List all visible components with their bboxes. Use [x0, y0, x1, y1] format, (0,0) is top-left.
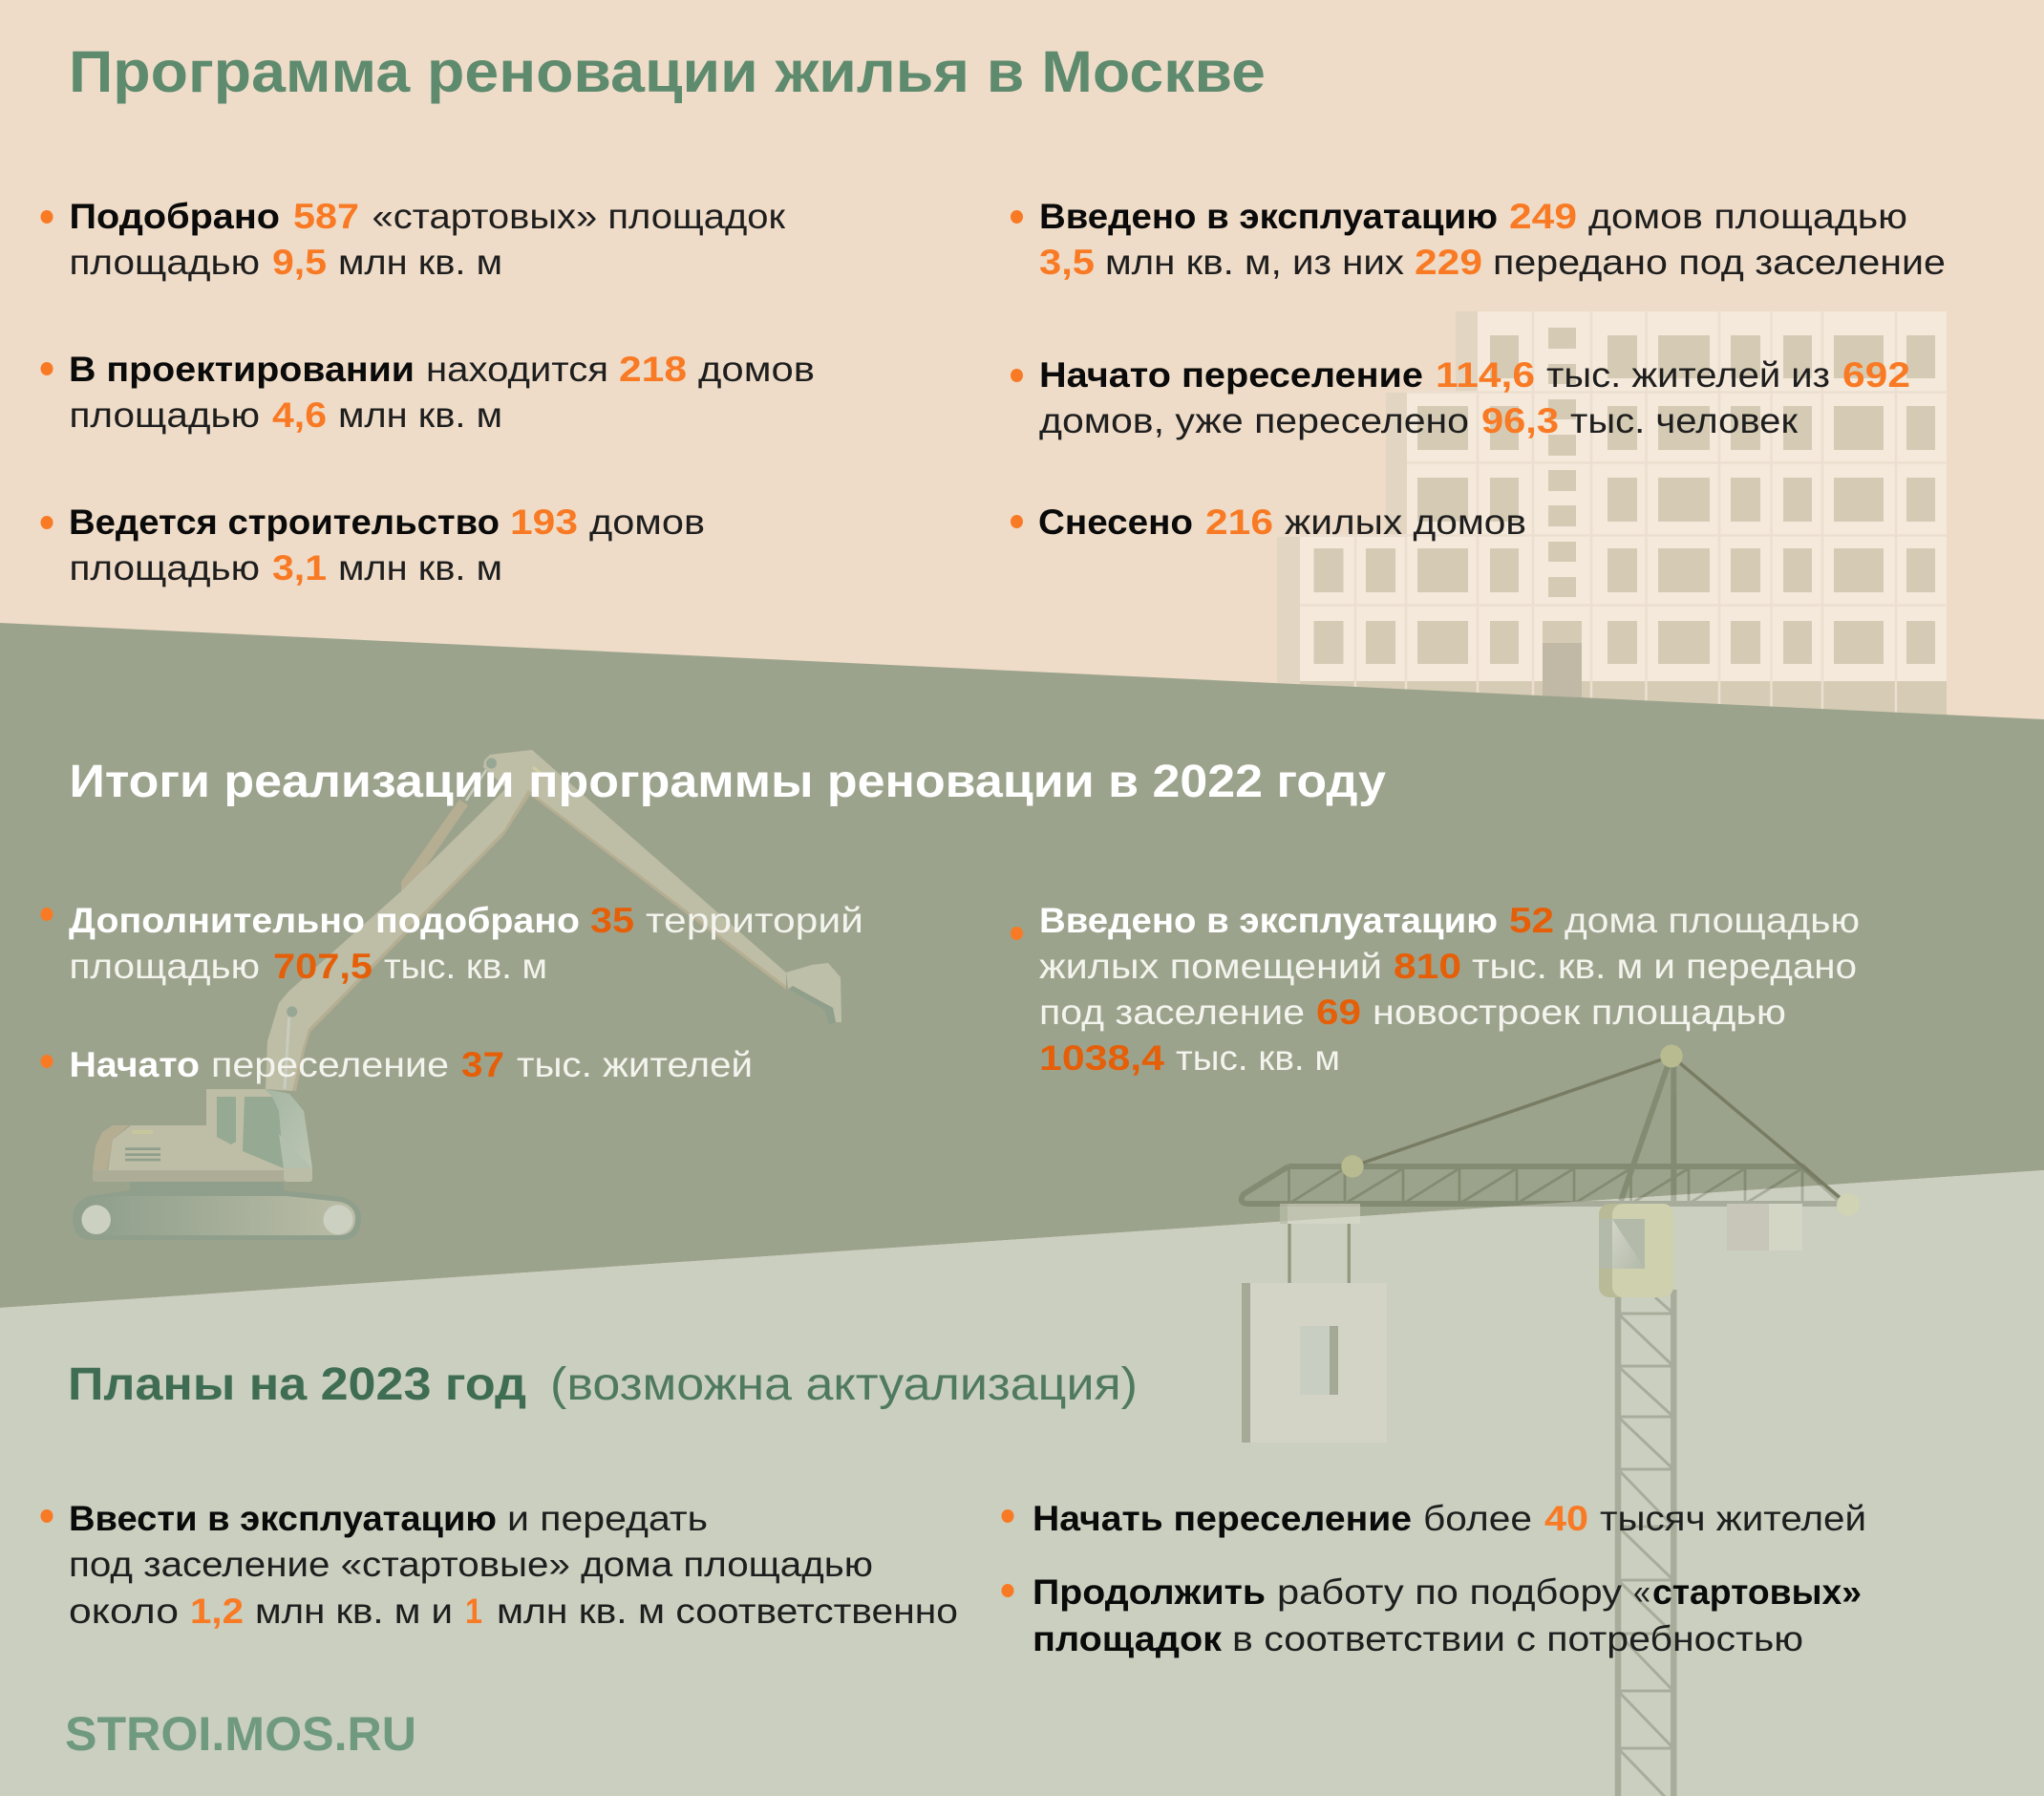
text block: green section right column: 810: [1394, 947, 1461, 986]
bullet item: under construction: 193: [510, 502, 578, 542]
footer: source site: STROI.MOS.RU: [65, 1707, 416, 1761]
bullet item: resettlement started: 96,3: [1481, 401, 1559, 440]
text block: green section right column: жилых помещений: [1039, 947, 1382, 986]
bullet item: continue site selection: [1001, 1572, 1862, 1658]
bullet item: selected sites: 9,5: [272, 243, 327, 282]
text block: green section right column: 1038,4: [1039, 1038, 1164, 1078]
bullet item: under construction: площадью: [69, 548, 260, 588]
illustration: apartment building: [1277, 311, 1947, 726]
bullet item: in design: площадью: [69, 396, 260, 435]
heading: plans for 2023: (возможна актуализация): [550, 1359, 1138, 1410]
bullet item: selected sites: [40, 197, 786, 282]
bullet item: selected sites: Подобрано: [69, 197, 280, 236]
text block: green section right column: 52: [1509, 901, 1554, 940]
bullet item: commissioned: 229: [1415, 243, 1482, 282]
panel: green middle band background: [0, 623, 2044, 1308]
bullet item: resettlement started: домов, уже переселено: [1039, 401, 1469, 440]
bullet item: continue site selection: «: [1633, 1572, 1650, 1612]
bullet item: resettlement of 37 thousand: тыс. жителей: [517, 1045, 753, 1084]
bullet item: demolished: жилых домов: [1285, 502, 1526, 542]
text block: green section right column: Введено в эксплуатацию: [1039, 901, 1498, 940]
bullet item: selected sites: площадью: [69, 243, 260, 282]
text block: plans left column: 1,2: [190, 1592, 244, 1631]
bullet item: commissioned: 3,5: [1039, 243, 1095, 282]
text block: green section right column: под заселение: [1039, 993, 1305, 1032]
bullet item: continue site selection: Продолжить: [1033, 1572, 1266, 1612]
bullet item: under construction: [40, 502, 705, 588]
bullet item: under construction: домов: [589, 502, 705, 542]
bullet item: additional territories: 707,5: [273, 947, 373, 986]
text block: beige section right column: [1011, 197, 1946, 542]
heading: main title: Программа реновации жилья в Москве: [69, 39, 1266, 104]
bullet item: commissioned: передано под заселение: [1493, 243, 1946, 282]
bullet item: continue site selection: работу по подбору: [1277, 1572, 1623, 1612]
bullet item: under construction: млн кв. м: [338, 548, 502, 588]
bullet item: resettlement started: Начато переселение: [1039, 355, 1423, 395]
bullet item: demolished: Снесено: [1038, 502, 1193, 542]
text block: green section right column: дома площадью: [1565, 901, 1860, 940]
bullet item: continue site selection: площадок: [1033, 1619, 1223, 1658]
panel: beige top section background: [0, 0, 2044, 764]
bullet item: under construction: Ведется строительство: [69, 502, 500, 542]
text block: plans left column: и передать: [507, 1499, 708, 1538]
bullet item: commissioned: [1011, 197, 1946, 282]
text block: plans left column: [40, 1499, 958, 1631]
bullet item: demolished: 216: [1205, 502, 1273, 542]
text block: plans left column: Ввести в эксплуатацию: [69, 1499, 497, 1538]
bullet item: start resettlement: более: [1423, 1499, 1532, 1538]
illustration: tower crane: [1242, 1045, 1860, 1796]
bullet item: selected sites: млн кв. м: [338, 243, 502, 282]
bullet item: additional territories: территорий: [646, 901, 863, 940]
bullet item: resettlement started: тыс. человек: [1570, 401, 1799, 440]
bullet item: continue site selection: в соответствии с потребностью: [1232, 1619, 1803, 1658]
bullet item: commissioned: млн кв. м, из них: [1105, 243, 1405, 282]
bullet item: in design: млн кв. м: [338, 396, 502, 435]
panel: light bottom section background: [0, 1170, 2044, 1796]
text block: plans left column: под заселение «стартовые» дома площадью: [69, 1545, 873, 1584]
bullet item: resettlement started: 114,6: [1436, 355, 1535, 395]
bullet item: additional territories: Дополнительно подобрано: [69, 901, 580, 940]
bullet item: commissioned: домов площадью: [1588, 197, 1907, 236]
bullet item: under construction: 3,1: [272, 548, 327, 588]
text block: green section right column: тыс. кв. м и передано: [1472, 947, 1857, 986]
text block: beige section left column: [40, 197, 815, 588]
bullet item: additional territories: тыс. кв. м: [384, 947, 547, 986]
bullet item: demolished: [1011, 502, 1526, 542]
bullet item: additional territories: 35: [590, 901, 634, 940]
text block: green section right column: тыс. кв. м: [1176, 1038, 1340, 1078]
text block: green section left column: [40, 901, 863, 1084]
bullet item: commissioned: Введено в эксплуатацию: [1039, 197, 1498, 236]
bullet item: start resettlement: 40: [1544, 1499, 1588, 1538]
text block: green section right column: [1011, 901, 1860, 1078]
bullet item: start resettlement: тысяч жителей: [1600, 1499, 1866, 1538]
heading: plans for 2023: [68, 1359, 1138, 1410]
bullet item: start resettlement: [1001, 1499, 1866, 1538]
bullet item: in design: находится: [426, 350, 608, 389]
heading: 2022 results: Итоги реализации программы реновации в 2022 году: [69, 757, 1386, 807]
heading: plans for 2023: Планы на 2023 год: [68, 1359, 526, 1410]
bullet item: in design: В проектировании: [69, 350, 415, 389]
bullet item: selected sites: «стартовых» площадок: [373, 197, 786, 236]
text block: green section right column: новостроек площадью: [1373, 993, 1786, 1032]
text block: plans left column: 1: [465, 1592, 482, 1631]
bullet item: resettlement of 37 thousand: Начато: [69, 1045, 200, 1084]
bullet item: resettlement started: тыс. жителей из: [1546, 355, 1830, 395]
bullet item: resettlement of 37 thousand: [40, 1045, 753, 1084]
bullet item: in design: 4,6: [272, 396, 327, 435]
bullet item: in design: [40, 350, 815, 435]
bullet item: start resettlement: Начать переселение: [1033, 1499, 1412, 1538]
bullet item: in design: домов: [698, 350, 815, 389]
text block: plans right column: [1001, 1499, 1866, 1658]
bullet item: commissioned: 249: [1509, 197, 1577, 236]
text block: green section right column: 69: [1316, 993, 1361, 1032]
bullet item: additional territories: [40, 901, 863, 986]
crane lattice and mast: [1242, 1060, 1845, 1796]
bullet item: selected sites: 587: [293, 197, 359, 236]
bullet item: continue site selection: стартовых»: [1652, 1572, 1862, 1612]
bullet item: resettlement of 37 thousand: 37: [461, 1045, 504, 1084]
bullet item: in design: 218: [619, 350, 687, 389]
text block: plans left column: млн кв. м и: [255, 1592, 453, 1631]
bullet item: additional territories: площадью: [69, 947, 260, 986]
bullet item: resettlement started: 692: [1842, 355, 1910, 395]
bullet item: resettlement started: [1011, 355, 1910, 440]
text block: plans left column: около: [69, 1592, 179, 1631]
illustration: excavator: [73, 750, 841, 1240]
text block: plans left column: млн кв. м соответственно: [497, 1592, 958, 1631]
bullet item: resettlement of 37 thousand: переселение: [211, 1045, 449, 1084]
